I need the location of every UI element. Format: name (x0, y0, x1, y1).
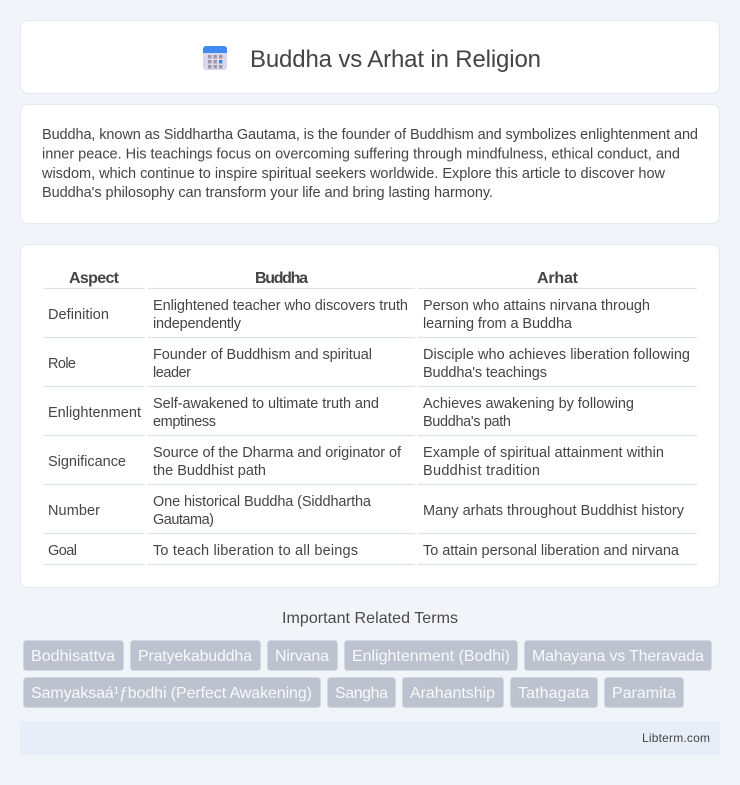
related term tags: Tathagata (518, 685, 589, 702)
panel: intro text: inner peace. His teachings focus on overcoming suffering through mindfulness, ethical conduct, and (42, 146, 680, 162)
header panel (20, 20, 720, 94)
row: enlightenment: emptiness (153, 414, 216, 430)
row: goal: To attain personal liberation and nirvana (423, 543, 680, 559)
row: number: Many arhats throughout Buddhist history (423, 503, 685, 519)
row: significance: Source of the Dharma and originator of (153, 445, 402, 461)
footer (20, 721, 720, 755)
row: definition: Enlightened teacher who discovers truth (153, 298, 408, 314)
row: significance: Buddhist tradition (423, 463, 540, 479)
row: role: Founder of Buddhism and spiritual (153, 347, 372, 363)
panel: comparison table (20, 244, 720, 588)
row: definition (48, 298, 650, 332)
row: number: One historical Buddha (Siddhartha (153, 494, 372, 510)
related term tags: Bodhisattva (31, 648, 115, 665)
panel: intro text: wisdom, which continue to inspire spiritual seekers worldwide. Explore this article to discover how (41, 166, 666, 182)
row: role (48, 347, 690, 381)
row: role: Buddha's teachings (423, 365, 547, 381)
panel: intro text: Buddha, known as Siddhartha Gautama, is the founder of Buddhism and symbolizes enlightenment and (42, 127, 698, 143)
table header row: Buddha (255, 270, 308, 287)
row: enlightenment: Enlightenment (48, 405, 141, 421)
row: definition: Definition (48, 307, 109, 323)
row: significance: Significance (48, 454, 126, 470)
row: number (48, 494, 685, 528)
related term tags: Enlightenment (Bodhi) (352, 648, 510, 665)
row: enlightenment: Buddha's path (423, 414, 511, 430)
row: goal (48, 543, 680, 559)
table header row: Arhat (537, 270, 579, 287)
panel: intro text (20, 104, 720, 224)
related term tags: Samyaksaá¹ƒbodhi (Perfect Awakening) (31, 685, 312, 702)
related term tags: Mahayana vs Theravada (532, 648, 704, 665)
related term tags: Sangha (335, 685, 388, 702)
icon: calendar (203, 46, 227, 70)
title: Buddha vs Arhat in Religion (250, 46, 541, 73)
panel: intro text: Buddha's philosophy can transform your life and bring lasting harmony. (42, 185, 493, 201)
table header row (69, 270, 579, 287)
row: enlightenment: Self-awakened to ultimate truth and (153, 396, 379, 412)
row: goal: To teach liberation to all beings (153, 543, 358, 559)
row: role: Disciple who achieves liberation following (423, 347, 690, 363)
related term tags: Nirvana (275, 648, 329, 665)
row: significance (48, 445, 664, 479)
row: enlightenment: Achieves awakening by following (423, 396, 634, 412)
row: significance: the Buddhist path (153, 463, 266, 479)
row: definition: independently (153, 316, 242, 332)
row: role: leader (153, 365, 191, 381)
row: definition: Person who attains nirvana through (423, 298, 650, 314)
related term tags: Arahantship (410, 685, 495, 702)
table header row: Aspect (69, 270, 120, 287)
row: definition: learning from a Buddha (423, 316, 573, 332)
related term tags: Pratyekabuddha (138, 648, 252, 665)
row: number: Gautama) (153, 512, 214, 528)
row: role: Role (48, 356, 76, 372)
row: number: Number (48, 503, 100, 519)
row: enlightenment (48, 396, 634, 430)
related term tags (24, 640, 712, 708)
row: goal: Goal (48, 543, 77, 559)
related term tags: Paramita (612, 685, 676, 702)
row: significance: Example of spiritual attainment within (423, 445, 664, 461)
heading: related terms: Important Related Terms (282, 610, 458, 627)
footer: Libterm.com (642, 731, 710, 745)
